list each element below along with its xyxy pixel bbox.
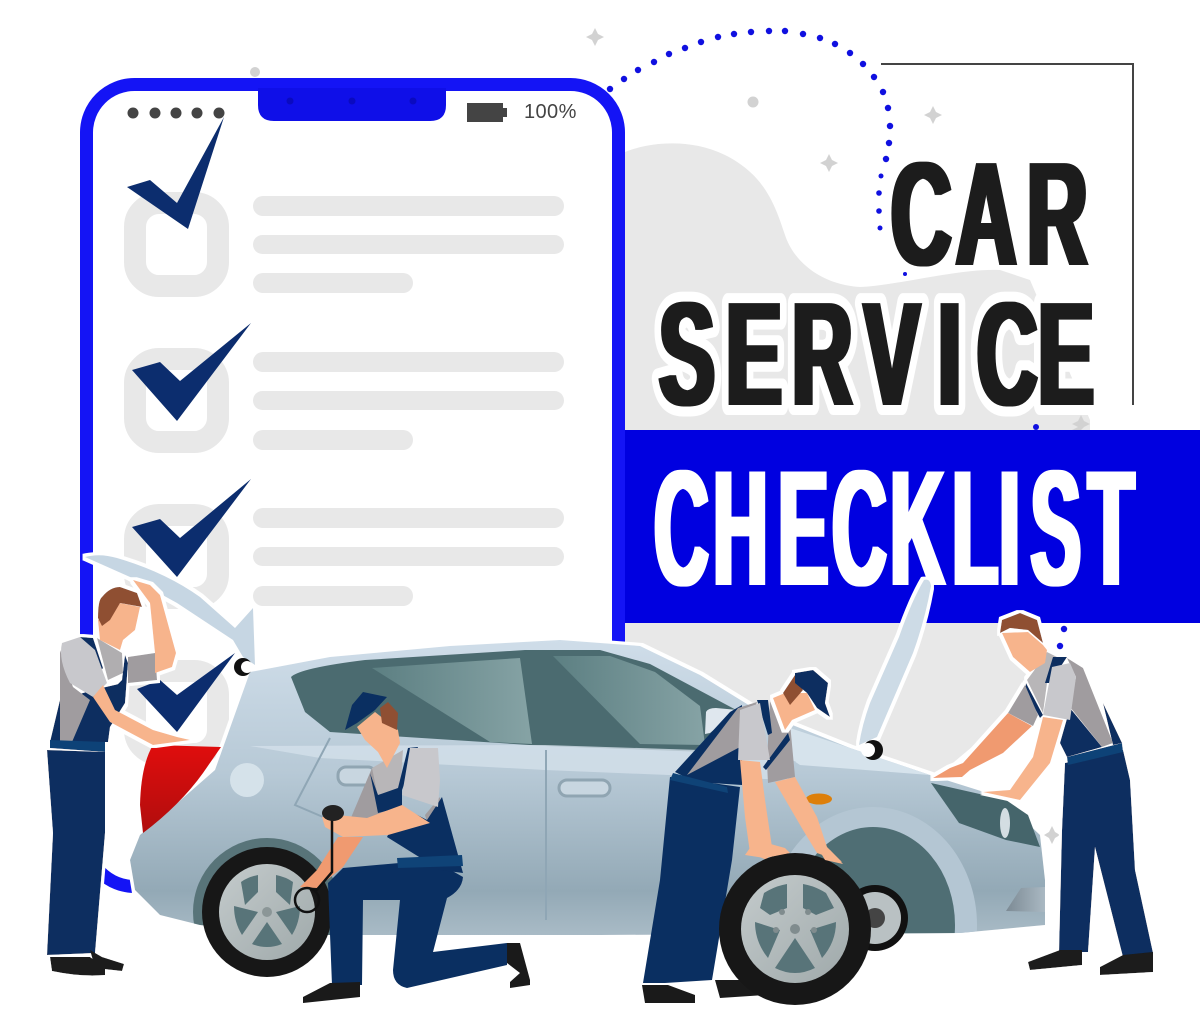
chest xyxy=(1027,652,1057,713)
sleeve xyxy=(738,703,770,760)
battery percentage: 100% xyxy=(524,101,577,123)
trunk hinge xyxy=(234,658,253,676)
overall front xyxy=(675,705,742,785)
trousers xyxy=(47,750,105,955)
overalls xyxy=(1060,703,1122,757)
mechanic at the hood xyxy=(933,613,1153,975)
chest xyxy=(767,698,795,783)
grey background blob xyxy=(625,143,1090,790)
mechanic with wheel xyxy=(642,670,842,1003)
car body xyxy=(130,640,1045,935)
shoes xyxy=(642,980,765,1003)
checklist row 4 xyxy=(135,653,235,754)
status dots xyxy=(128,108,224,118)
straps xyxy=(757,700,790,770)
loose wheel xyxy=(719,853,871,1005)
mechanic with tyre gauge xyxy=(295,692,530,1003)
title: CAR: CAR xyxy=(891,132,1088,297)
hood hinge xyxy=(861,740,883,760)
overall bib xyxy=(50,683,125,742)
battery icon xyxy=(467,103,507,122)
trunk lid xyxy=(85,555,255,665)
chest and bib xyxy=(372,750,403,797)
lower arm xyxy=(61,637,107,697)
shoes xyxy=(1028,950,1153,975)
legs xyxy=(328,860,507,988)
shoes xyxy=(303,943,530,1003)
head with halo xyxy=(773,670,830,730)
title: SERVICE: SERVICE xyxy=(659,272,1094,437)
trousers xyxy=(643,777,740,983)
arms xyxy=(740,760,772,860)
checklist row 2 xyxy=(132,323,564,450)
hands on wheel xyxy=(745,843,843,864)
decorative stars and dots xyxy=(250,28,1090,844)
hood prop xyxy=(859,580,931,745)
checklist row 1 xyxy=(127,117,564,293)
door seams and handles xyxy=(295,738,610,920)
brake disc xyxy=(842,885,908,951)
dotted arc xyxy=(607,28,1067,649)
orange marker xyxy=(806,794,832,804)
bumper vent xyxy=(1006,887,1045,912)
chest and straps xyxy=(97,638,123,680)
tyre gauge xyxy=(315,815,332,892)
mechanic at the trunk xyxy=(47,580,190,976)
torso back xyxy=(350,768,388,835)
head xyxy=(98,603,140,650)
checklist rows xyxy=(127,117,564,754)
title: SERVICE: SERVICE xyxy=(659,272,1094,437)
head xyxy=(357,712,400,768)
headlight xyxy=(931,783,1040,847)
straps xyxy=(1025,657,1067,718)
checklist row 3 xyxy=(132,479,564,606)
blue banner xyxy=(625,430,1200,623)
head xyxy=(1002,632,1047,672)
title: CHECKLIST: CHECKLIST xyxy=(654,437,1134,621)
car shoulder highlight xyxy=(250,745,790,780)
rear wheel arch and front wheel arch xyxy=(193,810,977,935)
shoes xyxy=(50,950,124,976)
raised arm xyxy=(128,653,157,683)
car xyxy=(130,640,1045,977)
arms xyxy=(933,713,1032,778)
trousers xyxy=(1059,750,1153,957)
title frame xyxy=(881,64,1133,405)
back shirt xyxy=(687,702,757,775)
arms xyxy=(322,805,430,837)
fuel cap xyxy=(230,763,264,797)
car windows xyxy=(291,650,823,762)
tail light xyxy=(140,745,221,833)
phone frame xyxy=(86,84,618,886)
rear wheel xyxy=(202,847,332,977)
phone notch xyxy=(258,88,446,121)
hood xyxy=(770,724,930,775)
sleeves xyxy=(1008,685,1038,726)
